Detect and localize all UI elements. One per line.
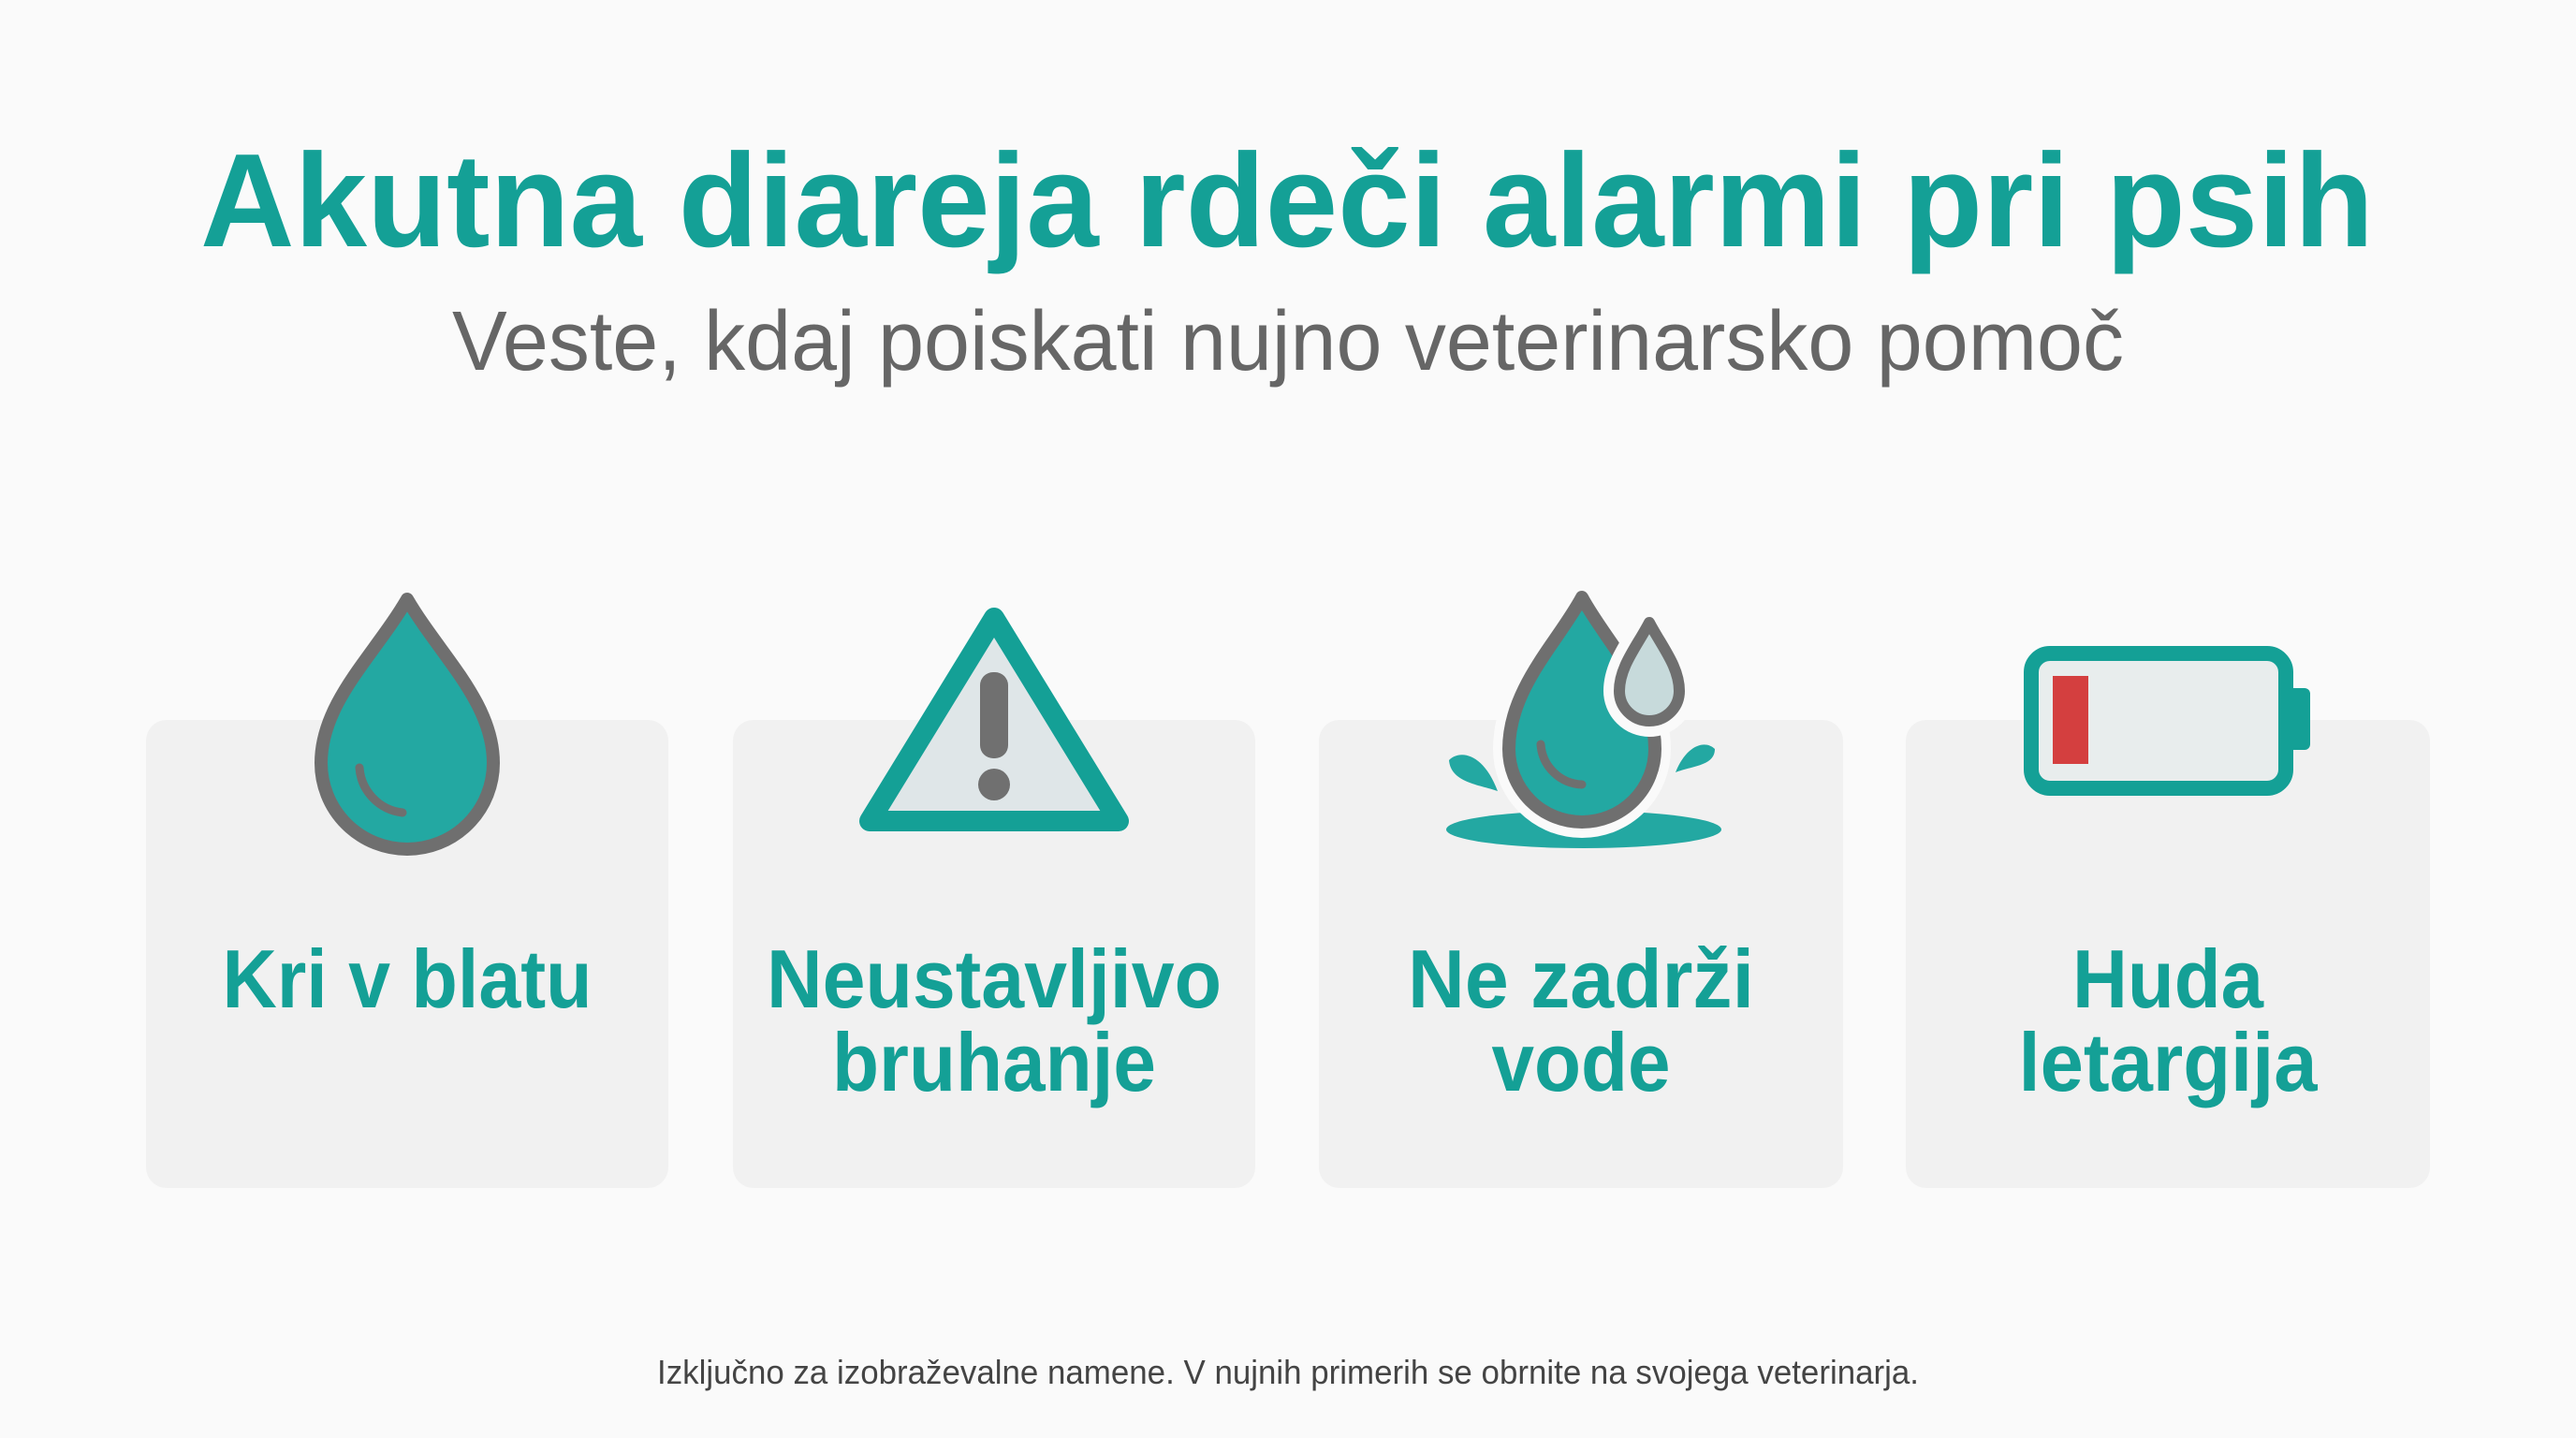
footer disclaimer: Izključno za izobraževalne namene. V nujnih primerih se obrnite na svojega veterinarja. <box>657 1353 1919 1391</box>
label: ne zadrzi vode: Ne zadrži <box>1408 932 1754 1025</box>
icon: blood drop <box>321 599 493 849</box>
icon: water splash <box>1446 597 1721 848</box>
label: kri v blatu: Kri v blatu <box>223 932 592 1025</box>
panel: bruhanje <box>733 618 1255 1188</box>
label: huda letargija: Huda <box>2072 932 2264 1025</box>
panel: ne zadrzi vode <box>1319 597 1843 1188</box>
label: neustavljivo bruhanje: Neustavljivo <box>767 932 1222 1025</box>
label: huda letargija <box>2018 932 2318 1108</box>
label: ne zadrzi vode <box>1408 932 1754 1108</box>
title: Akutna diareja rdeči alarmi pri psih <box>200 126 2374 275</box>
label: huda letargija: letargija <box>2018 1016 2318 1108</box>
label: neustavljivo bruhanje <box>767 932 1222 1108</box>
label: ne zadrzi vode: vode <box>1492 1016 1670 1108</box>
icon: low battery <box>2031 653 2310 788</box>
label: neustavljivo bruhanje: bruhanje <box>832 1016 1156 1108</box>
subtitle: Veste, kdaj poiskati nujno veterinarsko pomoč <box>452 295 2124 389</box>
panel: huda letargija <box>1906 653 2430 1188</box>
icon: warning triangle <box>870 618 1119 821</box>
panel: kri v blatu <box>146 599 668 1188</box>
